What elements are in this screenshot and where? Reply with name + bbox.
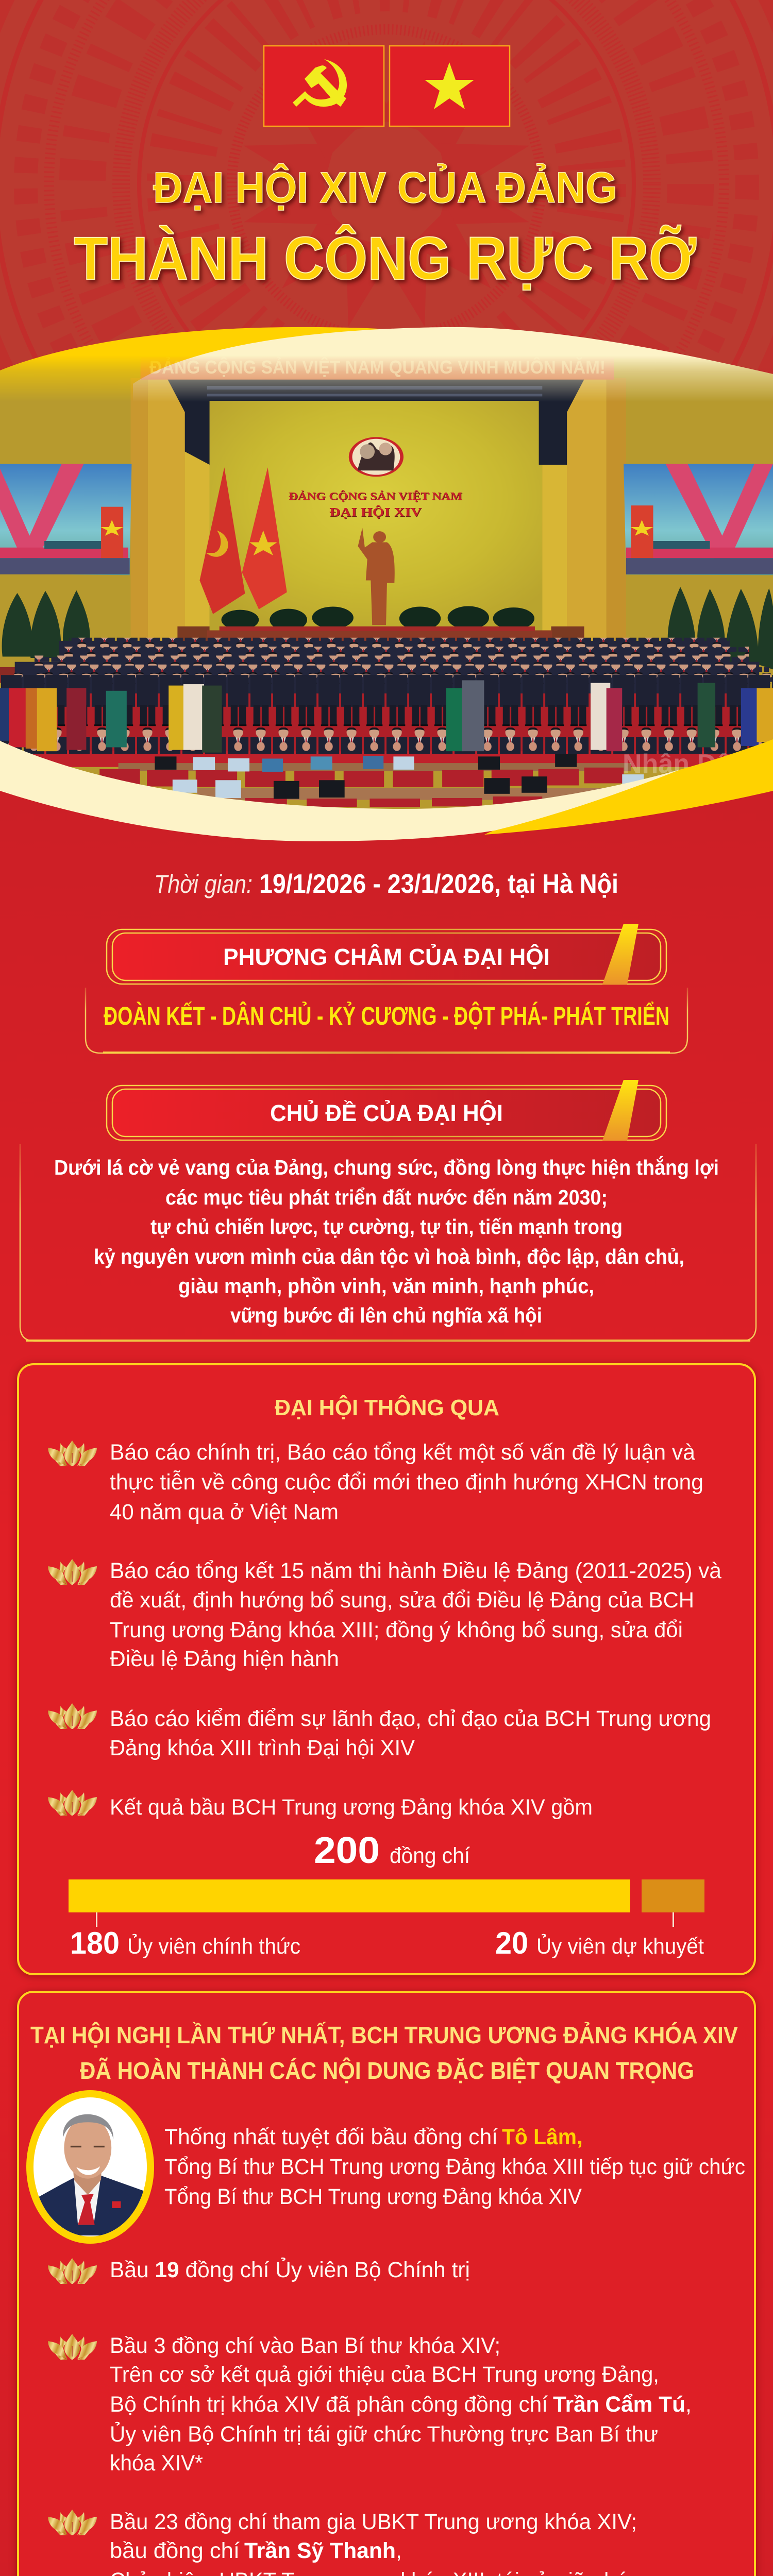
heading: chủ đề	[107, 1080, 666, 1141]
item 3: Báo cáo kiểm điểm sự lãnh đạo, chỉ đạo của BCH Trung ương	[110, 1706, 711, 1731]
item: Ban Bí thư: Trên cơ sở kết quả giới thiệu của BCH Trung ương Đảng,	[110, 2362, 659, 2387]
left pillar	[131, 378, 210, 641]
text: Tô Lâm: Tổng Bí thư BCH Trung ương Đảng khóa XIV	[164, 2184, 582, 2209]
date label: Thời gian:	[154, 870, 253, 899]
national flag in hall	[242, 467, 287, 609]
bar: official	[69, 1879, 630, 1912]
total number: 200	[314, 1830, 380, 1871]
item: UBKT: bầu đồng chí	[110, 2538, 240, 2563]
panel: đại hội thông qua	[18, 1364, 755, 1974]
centre wall	[210, 400, 542, 632]
item: Ban Bí thư: khóa XIV*	[110, 2451, 203, 2476]
watermark: Nhân Dân	[623, 749, 748, 779]
panel: chủ đề text	[20, 1144, 756, 1342]
title	[74, 163, 696, 293]
date value: 19/1/2026 - 23/1/2026, tại Hà Nội	[259, 869, 618, 899]
banner slogan: ĐẢNG CỘNG SẢN VIỆT NAM QUANG VINH MUÔN NĂM!	[149, 356, 606, 378]
item 1: Báo cáo chính trị, Báo cáo tổng kết một số vấn đề lý luận và	[110, 1440, 695, 1465]
item 2: Trung ương Đảng khóa XIII; đồng ý không bổ sung, sửa đổi	[110, 1618, 683, 1642]
stage	[0, 667, 773, 767]
label: 20: Ủy viên dự khuyết	[536, 1934, 704, 1959]
label: 180: 180	[70, 1926, 120, 1960]
trees	[2, 587, 773, 670]
item: Ban Bí thư: Bầu 3 đồng chí vào Ban Bí thư khóa XIV;	[110, 2333, 500, 2358]
item 1	[48, 1440, 703, 1524]
panel: hội nghị lần thứ nhất	[18, 1992, 755, 2576]
text: Tô Lâm: Tô Lâm	[502, 2125, 577, 2149]
item 1: 40 năm qua ở Việt Nam	[110, 1500, 339, 1524]
wall text line 2: ĐẠI HỘI XIV	[329, 506, 422, 519]
item 2: Điều lệ Đảng hiện hành	[110, 1647, 339, 1671]
congress hall photo	[0, 323, 773, 822]
hammer and sickle on hall flag	[206, 531, 228, 557]
tie	[78, 2194, 95, 2225]
pin	[112, 2201, 121, 2208]
banner	[141, 357, 614, 380]
bronze drum pattern background	[0, 0, 773, 617]
panel: chủ đề text: giàu mạnh, phồn vinh, văn minh, hạnh phúc,	[178, 1274, 594, 1298]
hair	[63, 2114, 113, 2139]
item 4: Kết quả bầu BCH Trung ương Đảng khóa XIV gồm	[110, 1795, 593, 1820]
hall wall text	[289, 490, 462, 519]
shirt	[74, 2176, 101, 2225]
panel heading: ĐẠI HỘI THÔNG QUA	[275, 1394, 499, 1420]
right screen	[624, 464, 773, 575]
title line 2: THÀNH CÔNG RỰC RỠ	[74, 224, 696, 293]
item: Ban Bí thư: Trần Cẩm Tú	[553, 2392, 685, 2417]
left screen	[0, 464, 131, 575]
item 3	[48, 1703, 711, 1760]
item 1: thực tiễn về công cuộc đổi mới theo định hướng XHCN trong	[110, 1470, 703, 1495]
side walls	[0, 323, 773, 822]
label: 20: 20	[495, 1926, 528, 1960]
statue	[358, 528, 395, 625]
wall text line 1: ĐẢNG CỘNG SẢN VIỆT NAM	[289, 490, 462, 502]
smile	[76, 2166, 100, 2175]
bar: alternate	[642, 1879, 704, 1912]
label: 20	[495, 1926, 704, 1960]
label: 180: Ủy viên chính thức	[127, 1934, 300, 1959]
text: Tô Lâm	[164, 2125, 745, 2209]
portrait	[30, 2094, 153, 2240]
item 2	[48, 1558, 721, 1671]
cream arc bottom	[0, 721, 711, 841]
label: 180	[70, 1926, 300, 1960]
emblem	[350, 438, 402, 476]
star on hall flag	[249, 531, 277, 555]
item 2: Báo cáo tổng kết 15 năm thi hành Điều lệ Đảng (2011-2025) và	[110, 1558, 721, 1583]
icon: party flag	[264, 46, 384, 126]
icon: national flag	[390, 46, 510, 126]
item: Bộ Chính trị: Bầu 19 đồng chí Ủy viên Bộ Chính trị	[110, 2257, 470, 2282]
item 3: Đảng khóa XIII trình Đại hội XIV	[110, 1736, 415, 1760]
coloured dresses	[0, 680, 773, 753]
total number	[314, 1830, 470, 1871]
panel: chủ đề text: tự chủ chiến lược, tự cường, tự tin, tiến mạnh trong	[150, 1215, 623, 1239]
palms	[222, 606, 534, 631]
delegates	[0, 638, 773, 754]
ceiling structure	[167, 379, 584, 465]
text: Tô Lâm: Tổng Bí thư BCH Trung ương Đảng khóa XIII tiếp tục giữ chức	[164, 2155, 745, 2179]
text: Tô Lâm: Thống nhất tuyệt đối bầu đồng chí	[164, 2125, 498, 2149]
neck	[73, 2167, 102, 2195]
yellow ribbon bottom	[484, 737, 773, 835]
panel heading: ĐÃ HOÀN THÀNH CÁC NỘI DUNG ĐẶC BIỆT QUAN TRỌNG	[80, 2057, 694, 2084]
panel: chủ đề text: vững bước đi lên chủ nghĩa xã hội	[230, 1303, 542, 1327]
item: Ban Bí thư	[48, 2333, 692, 2476]
cream arc top	[133, 327, 773, 412]
rostrum	[177, 626, 584, 645]
panel: chủ đề text: kỷ nguyên vươn mình của dân tộc vì hoà bình, độc lập, dân chủ,	[94, 1245, 684, 1268]
party flag in hall	[199, 467, 245, 614]
head	[64, 2117, 111, 2179]
yellow ribbon top	[0, 327, 407, 412]
item: Ban Bí thư: ,	[685, 2392, 692, 2417]
panel: phương châm motto	[86, 988, 687, 1054]
total number: đồng chí	[390, 1843, 470, 1868]
suit	[35, 2176, 153, 2235]
item: Ban Bí thư: Ủy viên Bộ Chính trị tái giữ chức Thường trực Ban Bí thư	[110, 2421, 658, 2447]
delegate tables	[99, 754, 644, 807]
item: UBKT	[48, 2510, 669, 2576]
item: UBKT: ,	[396, 2538, 402, 2563]
right pillar	[542, 378, 626, 641]
date line	[154, 869, 618, 899]
heading: phương châm: PHƯƠNG CHÂM CỦA ĐẠI HỘI	[223, 944, 550, 970]
item: UBKT: Bầu 23 đồng chí tham gia UBKT Trung ương khóa XIV;	[110, 2510, 637, 2534]
panel: chủ đề text: các mục tiêu phát triển đất nước đến năm 2030;	[165, 1185, 608, 1209]
bar chart	[69, 1879, 704, 1927]
item 2: đề xuất, định hướng bổ sung, sửa đổi Điều lệ Đảng của BCH	[110, 1588, 694, 1613]
panel heading	[30, 2022, 738, 2084]
item: Ban Bí thư: Bộ Chính trị khóa XIV đã phân công đồng chí	[110, 2392, 548, 2417]
heading: chủ đề: CHỦ ĐỀ CỦA ĐẠI HỘI	[270, 1100, 503, 1126]
title line 1: ĐẠI HỘI XIV CỦA ĐẢNG	[153, 163, 617, 212]
text: Tô Lâm: ,	[577, 2125, 583, 2149]
item: UBKT: Trần Sỹ Thanh	[244, 2538, 396, 2563]
heading: phương châm	[107, 924, 666, 985]
panel: chủ đề text: Dưới lá cờ vẻ vang của Đảng, chung sức, đồng lòng thực hiện thắng lợi	[54, 1156, 719, 1179]
